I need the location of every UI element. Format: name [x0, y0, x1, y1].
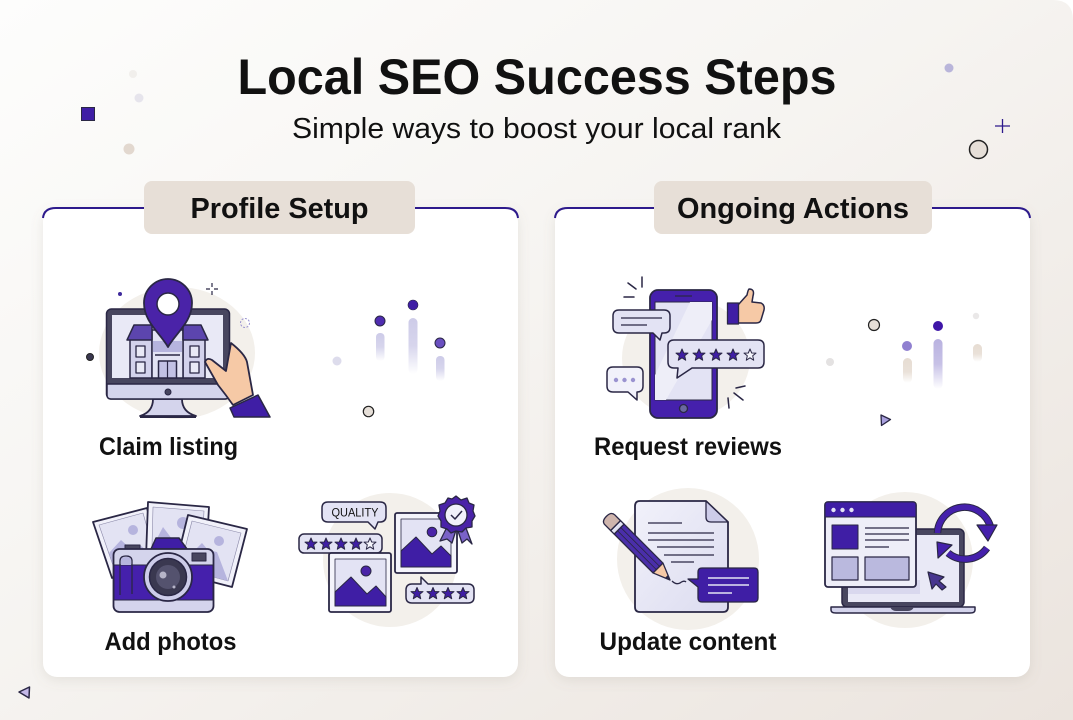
subtitle: Simple ways to boost your local rank: [292, 113, 782, 145]
section tab: ongoing actions: [654, 181, 932, 234]
panel: profile setup: [43, 181, 518, 677]
title: Local SEO Success Steps: [238, 49, 836, 105]
panel card: [555, 208, 1030, 677]
decorative triangle: bottom left: [19, 687, 30, 698]
label: request reviews: Request reviews: [594, 433, 782, 461]
panel top rule: [555, 208, 1030, 218]
top right corner cut: [1053, 0, 1073, 20]
decorative confetti: left: [82, 70, 144, 154]
decorative dots and bars: [332, 300, 445, 417]
icon: quality photos with ratings: [299, 493, 475, 627]
icon: document and pencil: [601, 488, 759, 630]
icon: monitor with map pin and hand: [86, 279, 270, 419]
section heading: Ongoing Actions: [677, 193, 909, 225]
label: claim listing: Claim listing: [99, 433, 238, 461]
label: add photos: Add photos: [104, 628, 236, 656]
panel top rule: [43, 208, 518, 218]
icon: website update on laptop: [825, 492, 997, 628]
decorative confetti: right: [944, 64, 1010, 158]
decorative dots and bars: [826, 313, 982, 426]
section heading: Profile Setup: [190, 193, 368, 225]
icon: phone with reviews: [607, 277, 764, 418]
section tab: profile setup: [144, 181, 415, 234]
panel card: [43, 208, 518, 677]
label: update content: Update content: [600, 628, 777, 656]
icon: camera with photos: [93, 502, 247, 612]
panel: ongoing actions: [555, 181, 1030, 677]
icon: quality photos with ratings: QUALITY: [332, 508, 379, 520]
